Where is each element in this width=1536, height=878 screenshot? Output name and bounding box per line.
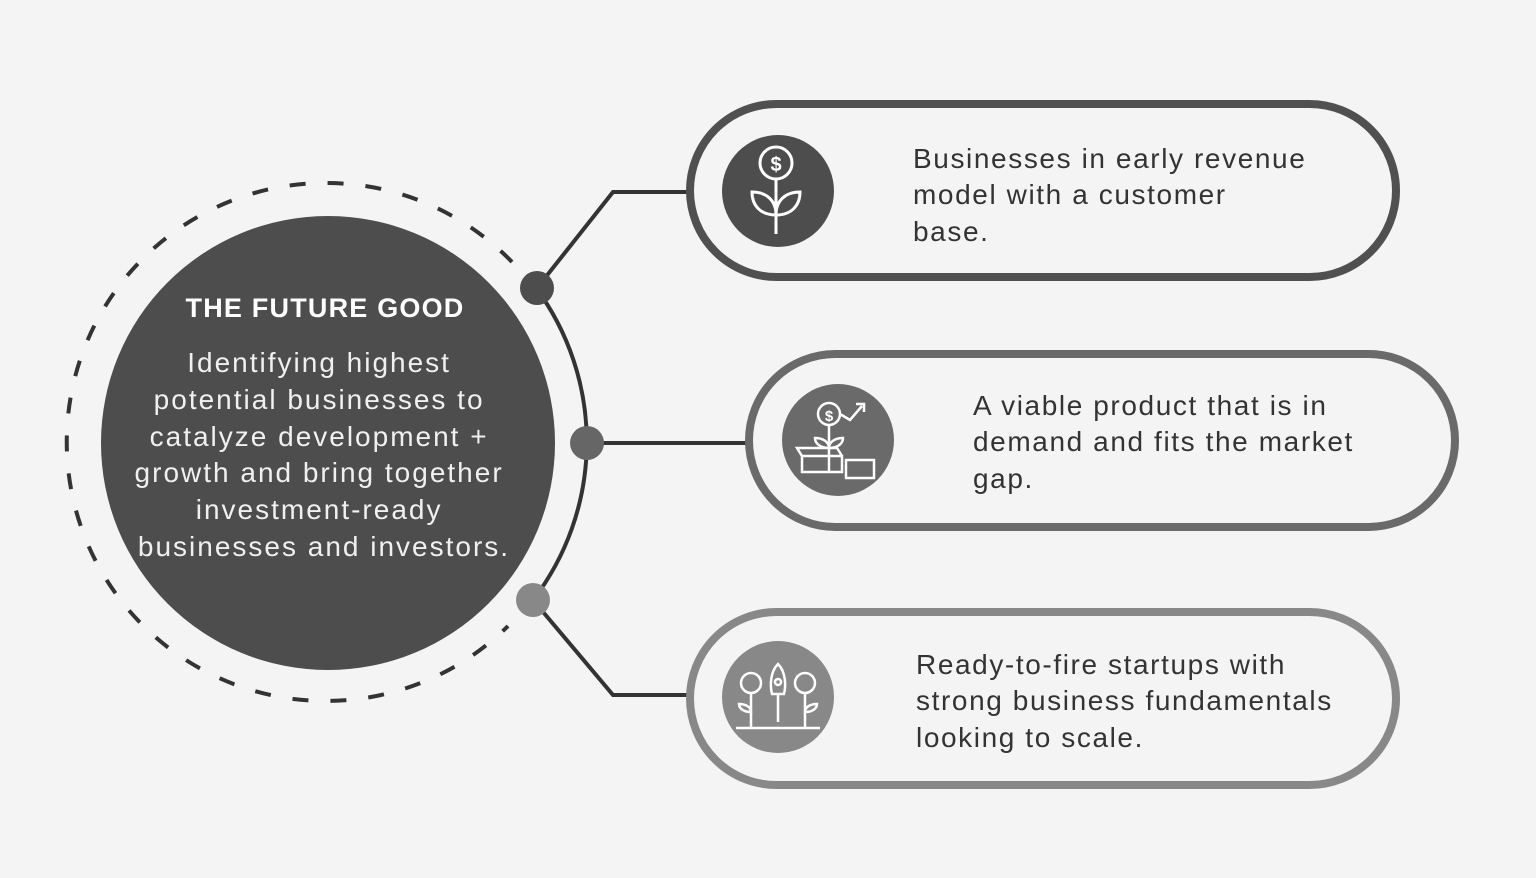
text: base. [913,216,990,247]
text: demand and fits the market [973,426,1354,457]
panel: early revenue [690,104,1396,277]
description: potential businesses to [154,384,485,415]
text: Ready-to-fire startups with [916,649,1286,680]
description: Identifying highest [187,347,451,378]
text: looking to scale. [916,722,1144,753]
icon: money plant: $ [770,154,782,176]
description: businesses and investors. [138,531,510,562]
title: THE FUTURE GOOD [186,293,464,323]
dashed outer ring [67,183,587,701]
icon: product box growth: $ [825,408,834,425]
text: gap. [973,463,1034,494]
panel: ready-to-fire startups [690,612,1396,785]
description: investment-ready [196,494,442,525]
text: model with a customer [913,179,1227,210]
central circle [101,216,555,670]
text: A viable product that is in [973,390,1328,421]
connector dots [516,271,604,617]
description: growth and bring together [135,457,504,488]
icon: rocket with plants [722,641,834,753]
text: Businesses in early revenue [913,143,1306,174]
connector lines [533,192,748,695]
icon: product box growth [782,384,894,496]
panel: viable product [749,354,1455,527]
description: catalyze development + [150,421,489,452]
icon: money plant [722,135,834,247]
text: strong business fundamentals [916,685,1333,716]
